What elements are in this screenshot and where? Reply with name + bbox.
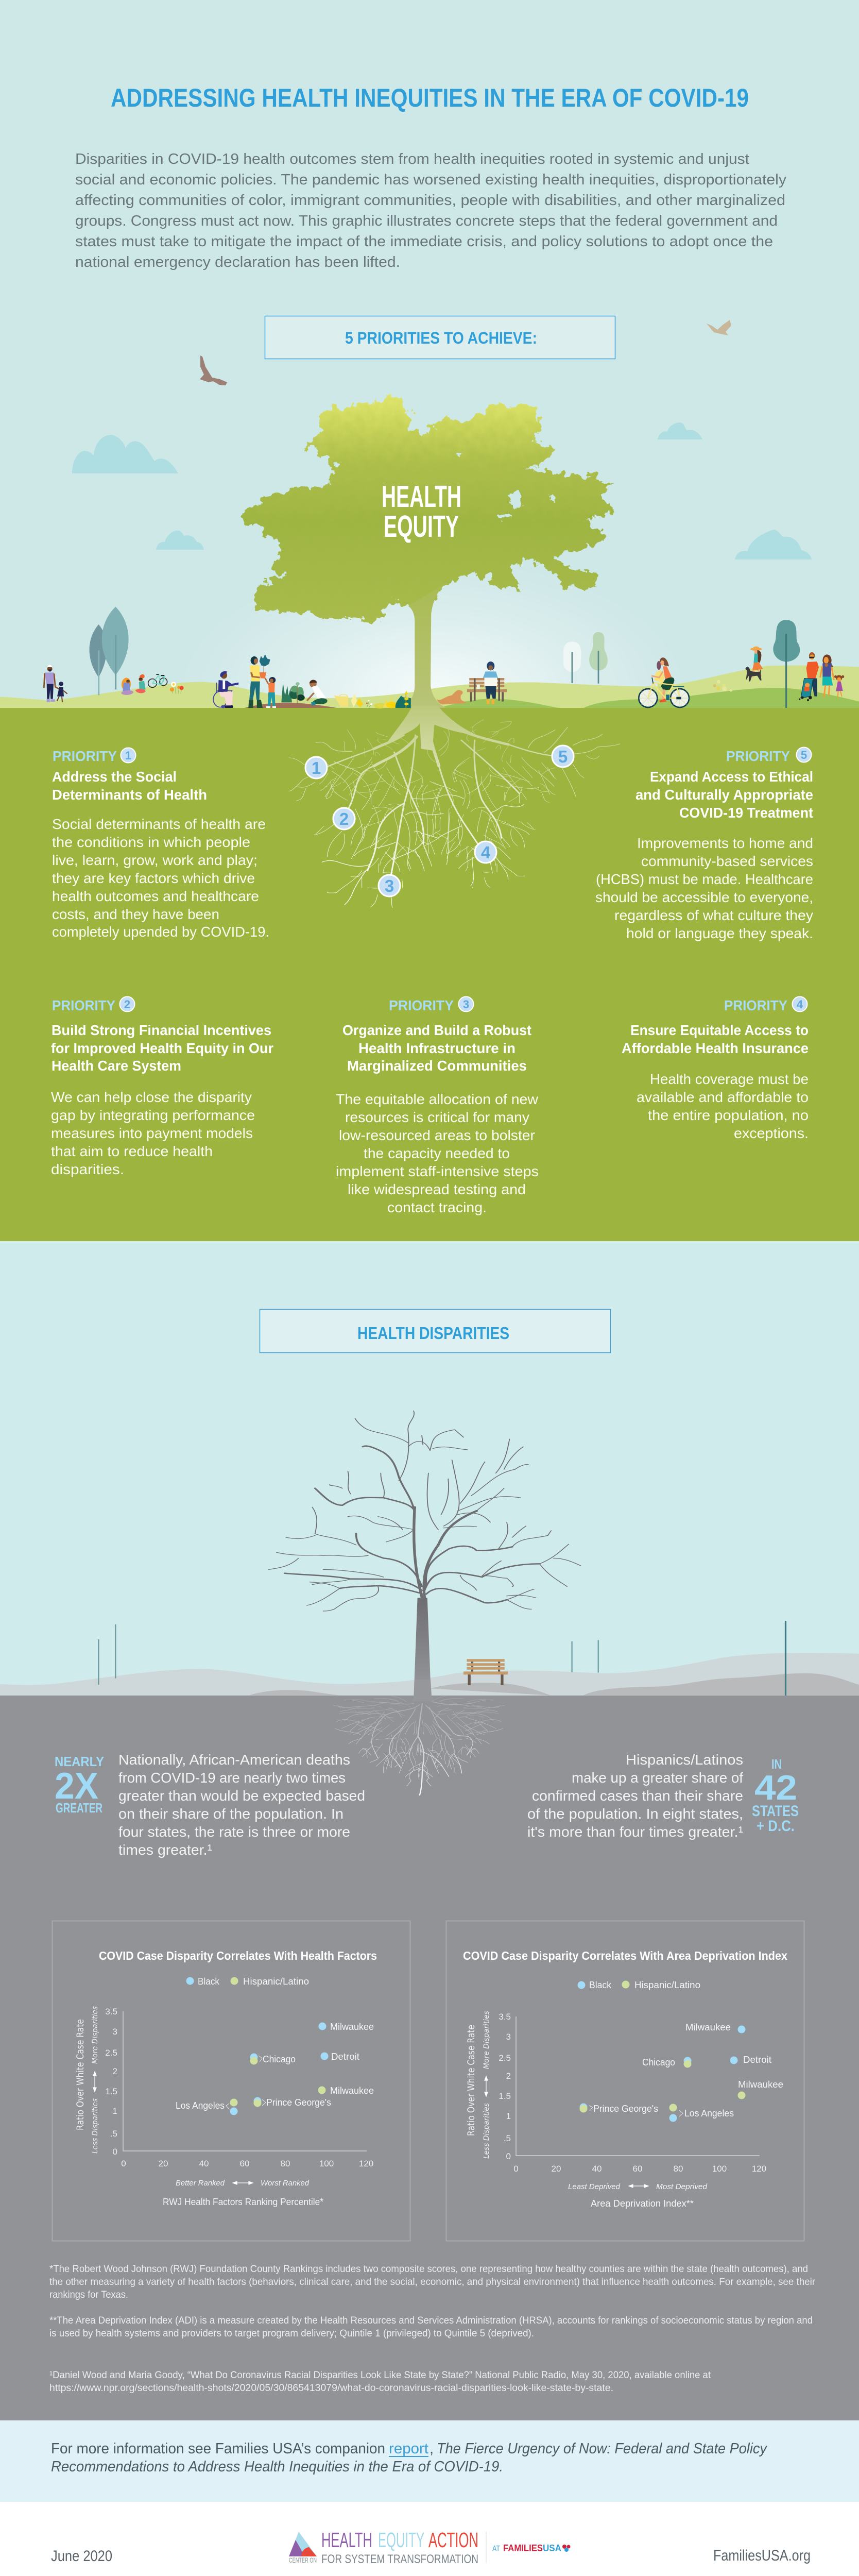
footer date: June 2020 [51,2548,112,2565]
x axis labels: Most Deprived [656,2182,708,2191]
legend: Black [589,1980,612,1990]
icon: brown bird [200,355,227,385]
bench with man and laptop, dog [437,662,507,704]
panel: priority 5: regardless of what culture they [614,907,813,923]
point labels: Detroit [331,2052,359,2062]
point labels: Prince George's [593,2104,658,2114]
footnotes: https://www.npr.org/sections/health-shots/2020/05/30/865413079/what-do-coronavirus-racial-disparities-look-like-state-by-state. [49,2383,613,2394]
panel: priority 3: Marginalized Communities [347,1058,527,1074]
x axis labels: Least Deprived [568,2182,621,2191]
people: woman walking dog [745,647,763,682]
stat: in 42 states + D.C. [752,1756,799,1835]
panel: priority 5 [595,747,813,941]
footnotes: the other measuring a variety of health factors (behaviors, clinical care, and the social, economic, and physical environment) that influence health outcomes. For example, see their [49,2277,816,2287]
section: sky background [0,0,859,709]
point labels: Milwaukee [685,2022,731,2032]
point labels: Chicago [642,2057,675,2067]
footnotes: rankings for Texas. [49,2290,128,2300]
logo: health equity action: FAMILIES [503,2543,543,2553]
panel: priority 2: that aim to reduce health [51,1143,213,1159]
text: Hispanics/Latinos: Hispanics/Latinos [626,1752,743,1768]
scatter axes: 40 [199,2159,209,2168]
stat: in 42 states + D.C.: STATES [752,1803,799,1820]
people: woman and child planting [245,654,336,708]
logo: health equity action: CENTER ON [289,2556,317,2564]
logo: health equity action: EQUITY [378,2528,424,2552]
panel: priority 5: Expand Access to Ethical [650,769,813,785]
legend: Black [198,1976,220,1987]
text: Hispanics/Latinos: it's more than four times greater.¹ [527,1824,743,1840]
people: gardener [307,680,328,705]
text: African-American deaths: times greater.¹ [118,1842,212,1858]
panel: priority 2: gap by integrating performance [51,1107,255,1123]
gray tree roots [333,1696,505,1795]
panel: priority 4: available and affordable to [637,1089,809,1105]
footer website: FamiliesUSA.org [713,2547,811,2564]
panel: chart area deprivation index [446,1921,804,2241]
heading box: health disparities: HEALTH DISPARITIES [357,1324,509,1343]
panel: priority 2: Build Strong Financial Incentives [51,1022,271,1038]
panel: priority 2: disparities. [51,1161,124,1177]
legend: Hispanic/Latino [634,1980,700,1990]
scatter axes: 60 [633,2164,642,2174]
scatter axes: 1.5 [499,2091,511,2101]
legend [186,1976,309,1987]
logo: health equity action: ACTION [428,2528,478,2552]
scatter axes: .5 [504,2133,511,2143]
panel: priority 5: community-based services [641,853,813,869]
section: pale blue background [0,1241,859,1696]
panel: priority 1: they are key factors which drive [52,870,255,886]
text: Hispanics/Latinos: make up a greater share of [572,1770,743,1786]
tree label: health equity: EQUITY [384,510,459,544]
scatter axes: 3.5 [499,2012,511,2022]
tree label: health equity: HEALTH [382,480,461,514]
panel: priority 4: PRIORITY [724,997,787,1013]
y axis labels: Ratio Over White Case Rate [466,2025,477,2136]
footnotes: is used by health systems and providers to target program delivery; Quintile 1 (privileged) to Quintile 5 (deprived). [49,2328,534,2339]
scatter points [226,2023,329,2115]
watering can and yellow flowers [334,691,411,708]
panel: priority 2: We can help close the disparity [51,1089,252,1105]
priority root marker 1: 1 [312,758,321,777]
panel: priority 4: 4 [797,998,803,1011]
intro paragraph: states must take to mitigate the impact of the immediate crisis, and policy solutions to adopt once the [75,233,773,250]
logo: health equity action: AT [492,2545,500,2553]
stat: in 42 states + D.C.: 42 [754,1768,797,1807]
text: Hispanics/Latinos: of the population. In eight states, [527,1806,743,1822]
tree trunk [403,582,448,708]
stat: in 42 states + D.C.: IN [771,1756,782,1772]
footnotes: *The Robert Wood Johnson (RWJ) Foundation County Rankings includes two composite scores, one representing how healthy counties are within the state (health outcomes), and [49,2264,808,2275]
icon: tan bird [707,320,731,335]
panel: priority 2: measures into payment models [51,1125,253,1141]
priority root marker 2 [333,808,355,829]
y axis labels: More Disparities [483,2011,491,2069]
scatter axes: 80 [674,2164,683,2174]
panel: priority 5: 5 [801,749,807,761]
panel: priority 3 [336,996,539,1215]
y axis labels: Less Disparities [91,2098,99,2154]
title: ADDRESSING HEALTH INEQUITIES IN THE ERA OF COVID-19 [111,83,749,112]
callout: more information [0,2420,859,2502]
intro paragraph: national emergency declaration has been lifted. [75,254,400,270]
scatter axes: .5 [110,2129,117,2139]
gray trunk base [412,1680,434,1701]
intro paragraph: Disparities in COVID-19 health outcomes stem from health inequities rooted in systemic and unjust [75,151,749,167]
panel: priority 5: PRIORITY [726,748,790,764]
scatter axes: 60 [240,2159,249,2168]
panel: priority 4: Health coverage must be [650,1071,809,1087]
priority root marker 4: 4 [481,843,491,862]
panel: priority 2 [51,996,273,1177]
text: Hispanics/Latinos: confirmed cases than their share [532,1788,743,1804]
flowers [170,682,184,694]
point labels: Detroit [743,2055,771,2065]
priority root marker 5: 5 [558,747,568,766]
panel: priority 4: Ensure Equitable Access to [630,1022,809,1038]
plants in garden [281,682,305,703]
panel: priority 1: live, learn, grow, work and play; [52,852,257,868]
heading box: health disparities [260,1310,611,1353]
people: family with stroller [799,652,844,701]
panel: priority 5: hold or language they speak. [626,925,813,941]
gray hills and stems [0,1621,859,1696]
panel: priority 3: Organize and Build a Robust [342,1022,531,1038]
scatter axes: 3 [113,2027,117,2037]
scatter axes: 120 [359,2159,373,2168]
priority root marker 5 [552,745,574,767]
footnotes [49,2264,816,2394]
scatter axes: 20 [552,2164,561,2174]
bare tree [268,1411,581,1700]
point labels: Chicago [263,2054,296,2064]
panel: priority 5: and Culturally Appropriate [635,787,813,803]
panel: priority 3: the capacity needed to [364,1145,510,1161]
point labels: Milwaukee [330,2022,374,2032]
intro paragraph [75,151,787,270]
chart title: COVID Case Disparity Correlates With Health Factors [99,1949,377,1962]
scatter axes: 1.5 [105,2087,117,2096]
panel: priority 4: exceptions. [734,1125,809,1141]
panel: priority 5: Improvements to home and [637,835,813,851]
stat: nearly 2x greater: NEARLY [55,1754,104,1769]
scatter axes [499,2012,766,2174]
x axis labels: Worst Ranked [261,2179,310,2188]
x axis labels: RWJ Health Factors Ranking Percentile* [163,2197,323,2207]
people: man and child [44,665,67,702]
callout: more information: The Fierce Urgency of Now: Federal and State Policy [437,2441,767,2457]
point labels: Los Angeles [176,2100,225,2111]
footnotes: **The Area Deprivation Index (ADI) is a measure created by the Health Resources and Services Administration (HRSA), accounts for rankings of socioeconomic status by region and [49,2315,813,2326]
text: African-American deaths: Nationally, African-American deaths [118,1752,350,1768]
scatter axes: 2.5 [499,2053,511,2063]
panel: priority 1: Social determinants of health are [52,816,266,832]
panel: priority 2: PRIORITY [52,997,115,1013]
priority root marker 4 [475,841,496,863]
stat: nearly 2x greater [55,1754,104,1816]
scatter axes: 0 [113,2147,117,2157]
x axis labels: Better Ranked [176,2179,225,2188]
scatter axes: 100 [319,2159,334,2168]
icon: teal tree right [773,620,800,709]
scatter axes: 0 [513,2164,519,2174]
faint dandelions [713,680,732,692]
legend [578,1980,700,1990]
panel: priority 3: The equitable allocation of new [336,1091,539,1107]
scatter axes: 2 [113,2066,117,2076]
logo: health equity action: HEALTH [321,2528,372,2552]
tree roots [289,706,620,908]
scatter axes: 120 [752,2164,766,2174]
text: African-American deaths [118,1752,365,1858]
callout: more information: Recommendations to Address Health Inequities in the Era of COVID-19. [51,2459,503,2475]
intro paragraph: groups. Congress must act now. This graphic illustrates concrete steps that the federal government and [75,213,778,229]
panel: priority 1: Address the Social [52,769,177,785]
text: African-American deaths: four states, the rate is three or more [118,1824,350,1840]
priority root marker 1 [305,757,327,778]
scatter axes: 3 [506,2032,511,2042]
panel: priority 1 [52,748,269,940]
panel: priority 1: health outcomes and healthcare [52,888,259,904]
scatter axes [105,2007,373,2168]
clouds [72,422,812,560]
intro paragraph: social and economic policies. The pandemic has worsened existing health inequities, disproportionately [75,172,787,188]
panel: priority 3: PRIORITY [389,997,454,1013]
scatter axes: 20 [159,2159,168,2168]
canopy gaps showing sky [456,454,557,519]
scatter axes: 0 [121,2159,126,2168]
chart title: COVID Case Disparity Correlates With Area Deprivation Index [463,1949,787,1962]
point labels: Milwaukee [738,2079,783,2090]
y axis labels: Ratio Over White Case Rate [75,2019,86,2130]
panel: priority 2: for Improved Health Equity in Our [51,1040,273,1056]
panel: priority 5: COVID-19 Treatment [679,805,813,821]
panel: priority 1: 1 [125,749,131,762]
y axis labels [466,2011,491,2159]
panel: priority 1: PRIORITY [53,748,117,764]
tree label: health equity [382,480,461,544]
heading box: 5 priorities to achieve [265,316,615,359]
intro paragraph: affecting communities of color, immigrant communities, people with disabilities, and other marginalized [75,192,785,209]
section: white footer [0,2502,859,2576]
scatter axes: 1 [113,2106,117,2116]
people: two women sitting and bicycle [121,674,167,695]
scatter axes: 1 [506,2111,511,2121]
panel: priority 3: contact tracing. [387,1199,487,1215]
panel: priority 1: costs, and they have been [52,906,219,922]
panel: priority 2: 2 [124,998,130,1011]
panel: priority 3: Health Infrastructure in [358,1040,516,1056]
x axis labels [163,2179,323,2207]
panel: priority 5: (HCBS) must be made. Healthcare [596,871,813,887]
point labels [593,2022,783,2119]
priority root marker 3: 3 [385,876,394,895]
priority root marker 2: 2 [339,809,349,828]
callout: more information: , [430,2441,434,2457]
panel: priority 2: Health Care System [51,1058,181,1074]
panel: priority 1: the conditions in which people [52,834,250,850]
panel: priority 3: low-resourced areas to bolster [339,1127,535,1143]
panel: priority 3: implement staff-intensive steps [336,1163,539,1179]
point labels: Prince George's [266,2097,331,2108]
legend: Hispanic/Latino [243,1976,309,1987]
y axis labels: Less Disparities [483,2103,491,2159]
text: African-American deaths: from COVID-19 are nearly two times [118,1770,346,1786]
icon: pale trees centre right [563,632,608,684]
panel: priority 1: completely upended by COVID-19. [52,924,269,940]
heading box: 5 priorities to achieve: 5 PRIORITIES TO ACHIEVE: [345,329,537,347]
point labels: Los Angeles [684,2108,734,2119]
panel: priority 1: Determinants of Health [52,787,207,803]
y axis labels: More Disparities [91,2006,99,2064]
scatter points [580,2026,746,2122]
people: cyclist with passenger [639,657,689,707]
stat: nearly 2x greater: 2X [55,1766,98,1807]
scatter axes: 100 [712,2164,727,2174]
text: African-American deaths: on their share of the population. In [118,1806,343,1822]
scatter axes: 3.5 [105,2007,117,2016]
y axis labels [75,2006,99,2154]
tree canopy: health equity [241,398,613,622]
scatter axes: 80 [281,2159,290,2168]
point labels [176,2022,374,2111]
scatter axes: 40 [592,2164,602,2174]
panel: priority 3: like widespread testing and [348,1181,526,1197]
stat: nearly 2x greater: GREATER [56,1800,102,1816]
panel: priority 4: Affordable Health Insurance [622,1040,809,1056]
logo: health equity action: FOR SYSTEM TRANSFORMATION [321,2552,478,2566]
x axis labels [568,2182,708,2209]
panel: chart health factors [53,1921,410,2241]
point labels: Milwaukee [330,2086,374,2096]
scatter axes: 2.5 [105,2048,117,2058]
priority root marker 3 [379,875,400,896]
people: wheelchair user [213,671,238,708]
park bench [463,1659,508,1685]
panel: priority 5: should be accessible to everyone, [595,889,813,905]
stat: in 42 states + D.C.: + D.C. [757,1818,795,1835]
icon: tall leaf trees left [89,607,129,696]
logo: health equity action [289,2528,571,2566]
text: African-American deaths: greater than would be expected based [118,1788,365,1804]
glow behind tree [175,531,690,799]
section: gray ground [0,1696,859,2420]
panel: priority 4 [622,996,809,1141]
panel: priority 3: resources is critical for many [345,1109,529,1125]
scatter axes: 0 [506,2151,511,2161]
section: green ground [0,708,859,1241]
hills and background trees [0,607,859,709]
panel: priority 4: the entire population, no [648,1107,809,1123]
callout: more information: report [389,2441,428,2457]
footnotes: ¹Daniel Wood and Maria Goody, “What Do Coronavirus Racial Disparities Look Like State by State?” National Public Radio, May 30, 2020, available online at [49,2370,711,2381]
panel: priority 3: 3 [463,998,469,1011]
logo: health equity action: USA [543,2543,561,2553]
x axis labels: Area Deprivation Index** [591,2198,694,2209]
scatter axes: 2 [506,2071,511,2081]
callout: more information: For more information see Families USA’s companion [51,2441,385,2457]
text: Hispanics/Latinos [527,1752,743,1840]
